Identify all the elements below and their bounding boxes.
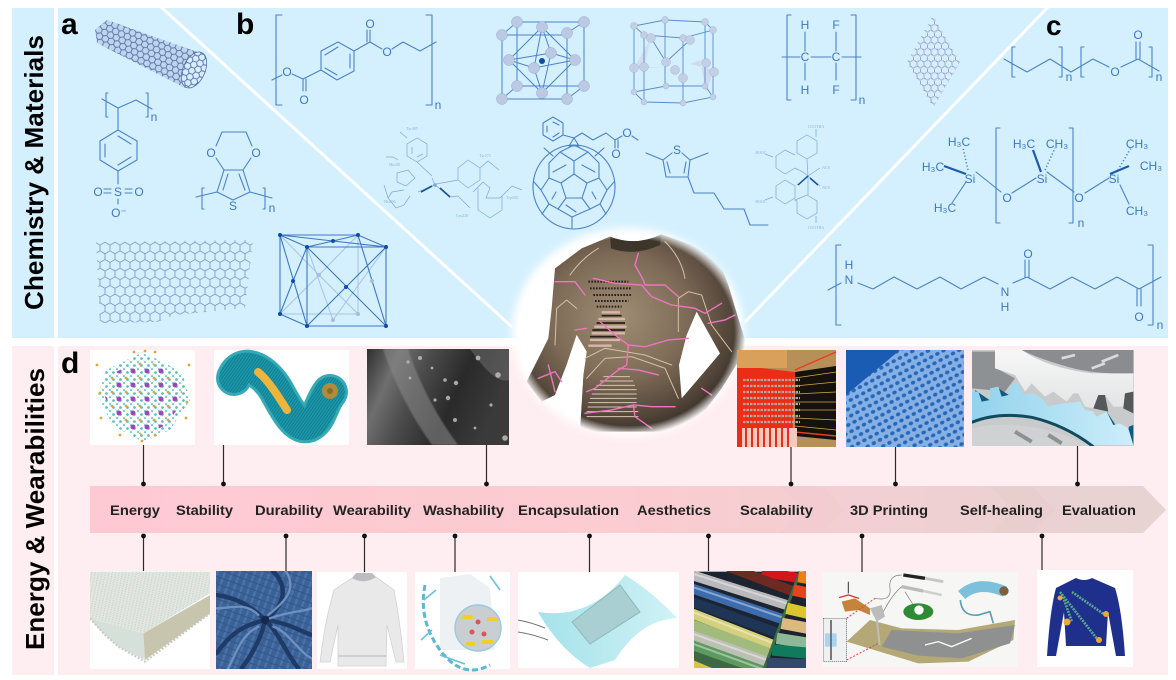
bar labels: 3D Printing <box>850 502 928 518</box>
siloxane structure: H₃C <box>922 160 944 174</box>
nylon structure: O <box>1023 247 1033 261</box>
PVDF structure: C <box>832 50 841 64</box>
PEDOT structure: S <box>229 199 237 213</box>
polyester copolymer structure: O <box>1110 65 1120 79</box>
siloxane structure: O <box>1002 191 1012 205</box>
waist stripes <box>587 377 638 417</box>
fibre <box>962 587 1005 595</box>
image: self-healing gears <box>972 350 1135 447</box>
connectors bottom row <box>141 534 1044 572</box>
PSS structure: n <box>151 110 157 124</box>
siloxane structure: H₃C <box>934 201 956 215</box>
pink lightning paths <box>538 253 735 428</box>
white gear <box>995 350 1133 408</box>
syringes <box>903 575 925 578</box>
FCC lattice cube <box>278 233 388 328</box>
image: evaluation blue shirt <box>1037 570 1133 667</box>
bar labels <box>110 502 1136 518</box>
PEDOT structure: O <box>206 146 216 160</box>
PVDF structure: F <box>832 83 840 97</box>
inset stage <box>823 618 847 662</box>
label a: a <box>61 8 78 41</box>
siloxane structure: H₃C <box>948 135 970 149</box>
bar labels: Self-healing <box>960 502 1043 518</box>
label b: b <box>236 8 254 41</box>
PVDF structure: C <box>801 50 810 64</box>
image: washability fabric micrograph <box>367 349 509 445</box>
bar labels: Washability <box>423 502 504 518</box>
graphene flake <box>907 15 960 108</box>
PVDF structure: n <box>859 93 865 107</box>
PET structure: O <box>382 45 392 59</box>
bar labels: Stability <box>176 502 233 518</box>
image: energy crystal lattice <box>90 350 195 445</box>
heading: Energy & Wearabilities: Energy & Wearabilities <box>20 368 50 650</box>
label d: d <box>61 347 79 380</box>
siloxane structure: CH₃ <box>1140 159 1162 173</box>
nylon structure: N <box>1001 285 1009 299</box>
PVDF structure: H <box>801 18 809 32</box>
N719 dye structure: HOOC <box>755 199 767 204</box>
siloxane structure: n <box>1078 216 1084 230</box>
PCBM fullerene <box>533 117 638 229</box>
image: durability blue fabric <box>216 570 312 669</box>
heading: Chemistry & Materials: Chemistry & Materials <box>19 35 49 310</box>
image: encapsulation patch <box>518 572 679 668</box>
bar labels: Aesthetics <box>637 502 711 518</box>
PCBM fullerene: O <box>611 147 621 161</box>
central shirt illustration <box>512 228 747 436</box>
tan sheet <box>847 620 1015 663</box>
FCC crystal with spheres <box>496 16 590 104</box>
leaf and flower <box>903 603 933 620</box>
metal complex diagram: Tyr495 <box>406 126 418 131</box>
PSS structure: O <box>93 185 103 199</box>
siloxane structure: CH₃ <box>1046 137 1068 151</box>
PSS structure: O <box>134 185 144 199</box>
PET structure: O <box>365 17 375 31</box>
image: wearability white sweater <box>317 572 407 669</box>
image: stability fibre brush <box>214 350 349 445</box>
PEDOT structure: n <box>269 201 275 215</box>
PEDOT structure: O <box>251 146 261 160</box>
polyester copolymer structure: O <box>1133 28 1143 42</box>
print head <box>842 598 870 615</box>
bar labels: Durability <box>255 502 323 518</box>
metal complex diagram: His381 <box>389 162 401 167</box>
PSS structure: S <box>114 185 122 199</box>
bar labels: Evaluation <box>1062 502 1136 518</box>
connectors top row <box>141 445 1080 486</box>
panel b materials <box>236 8 960 230</box>
panel c materials <box>828 10 1163 332</box>
siloxane structure: Si <box>1037 172 1047 186</box>
panel: energy sidebar <box>12 346 54 675</box>
PET structure: O <box>282 65 292 79</box>
graphene sheet <box>96 240 253 323</box>
metal complex diagram: Tyr272 <box>479 153 491 158</box>
timeline arrow bar <box>90 486 1166 533</box>
siloxane structure: Si <box>965 172 975 186</box>
chest dashes <box>588 282 632 307</box>
carbon nanotube <box>95 20 212 92</box>
nylon structure: H <box>1001 300 1009 314</box>
image: scalability loom textile <box>737 350 836 447</box>
bar labels: Wearability <box>333 502 411 518</box>
panel a materials <box>61 8 388 328</box>
background gears <box>972 352 1015 392</box>
P3HT structure: S <box>673 143 681 157</box>
panel: energy and wearabilities main <box>58 346 1168 675</box>
polyester copolymer structure <box>1004 28 1162 84</box>
metal complex diagram: His496 <box>384 199 396 204</box>
polyester copolymer structure: n <box>1156 70 1162 84</box>
N719 dye structure: COOTBA <box>808 225 824 230</box>
N719 dye structure: NCS <box>822 165 830 170</box>
metal complex diagram: Trp290 <box>506 195 518 200</box>
cream seams <box>555 242 732 398</box>
siloxane structure: CH₃ <box>1126 137 1148 151</box>
nylon structure: H <box>845 258 853 272</box>
blue gear <box>975 390 990 402</box>
polyester copolymer structure: n <box>1066 70 1072 84</box>
image: energy mesh fabric <box>90 571 210 669</box>
siloxane structure: CH₃ <box>1126 204 1148 218</box>
siloxane structure: Si <box>1109 172 1119 186</box>
N719 dye structure: HOOC <box>755 150 767 155</box>
nylon structure <box>828 245 1163 332</box>
metal complex diagram: Cys228 <box>456 213 468 218</box>
siloxane structure <box>922 128 1162 230</box>
PET structure: n <box>435 98 441 112</box>
PET structure: O <box>299 93 309 107</box>
N719 dye structure: COOTBA <box>808 124 824 129</box>
label c: c <box>1046 10 1062 41</box>
N719 dye structure: NCS <box>822 185 830 190</box>
PET structure <box>272 15 441 112</box>
bar labels: Encapsulation <box>518 502 619 518</box>
bar labels: Energy <box>110 502 160 518</box>
image: washability shirt and splash <box>415 572 510 670</box>
hexagonal crystal with spheres <box>630 16 718 106</box>
nylon structure: N <box>845 273 853 287</box>
bar labels: Scalability <box>740 502 813 518</box>
metal complex diagram <box>384 126 522 218</box>
nylon structure: n <box>1157 318 1163 332</box>
nylon structure: O <box>1134 310 1144 324</box>
PSS structure: O⁻ <box>111 206 127 220</box>
PVDF structure <box>782 15 865 107</box>
siloxane structure: O <box>1074 191 1084 205</box>
PSS structure <box>93 93 157 220</box>
P3HT structure <box>646 143 768 225</box>
image: aesthetics colourful fabric tubes <box>694 571 806 668</box>
N719 dye structure <box>755 124 830 230</box>
PEDOT structure <box>196 132 275 215</box>
panel: chemistry and materials main <box>58 7 1168 338</box>
image: 3D printing blue mesh <box>846 350 964 447</box>
PCBM fullerene: O <box>622 126 632 140</box>
PVDF structure: H <box>801 83 809 97</box>
PVDF structure: F <box>832 18 840 32</box>
image: 3D printing device scene <box>822 572 1018 667</box>
panel: chemistry sidebar <box>12 8 54 338</box>
shirt body <box>527 234 747 432</box>
siloxane structure: H₃C <box>1013 137 1035 151</box>
